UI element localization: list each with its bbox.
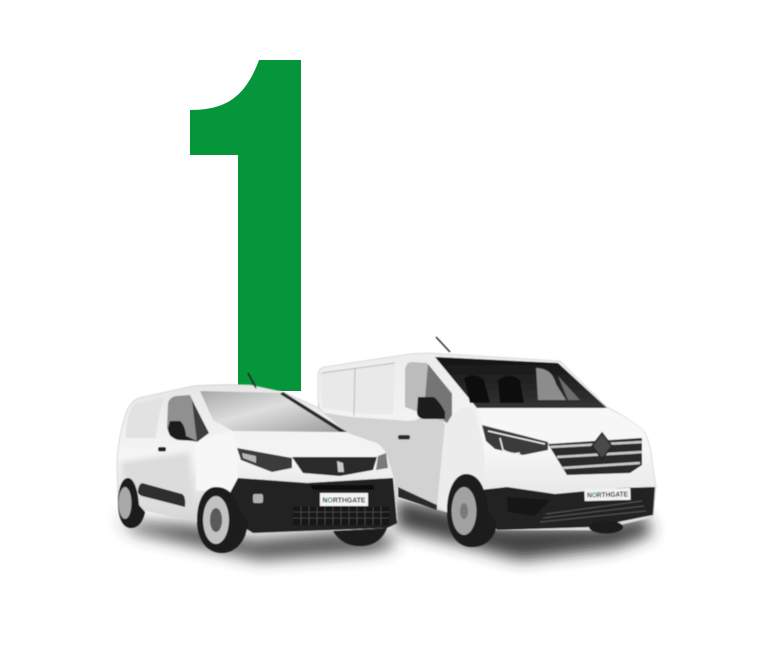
small van plate bbox=[320, 493, 368, 506]
small van front wheel bbox=[197, 487, 248, 553]
small van upper grille bbox=[292, 457, 377, 476]
small van antenna bbox=[248, 373, 256, 388]
small van fog lamp bbox=[253, 494, 263, 503]
small van headlight bbox=[237, 448, 292, 472]
small van windshield bbox=[200, 391, 343, 432]
large van bumper bbox=[480, 487, 655, 530]
large van windshield bbox=[435, 357, 607, 408]
large van: Renault bbox=[318, 337, 656, 547]
large van mirror bbox=[417, 397, 445, 419]
large van sill bbox=[398, 487, 437, 510]
large van plate bbox=[584, 488, 631, 501]
large van antenna bbox=[436, 337, 450, 352]
ground shadows bbox=[112, 498, 652, 560]
small van side window bbox=[167, 395, 208, 442]
large van headlight bbox=[482, 425, 548, 455]
small van rub strip bbox=[138, 483, 185, 507]
small van mirror bbox=[168, 421, 197, 441]
small van body bbox=[117, 385, 397, 533]
small van lower grille bbox=[293, 507, 389, 525]
small van right headlight bbox=[376, 453, 388, 470]
large van body bbox=[318, 353, 656, 530]
large van front wheel bbox=[447, 474, 497, 547]
large van side window bbox=[405, 362, 452, 423]
small van plate: NORTHGATE bbox=[322, 498, 366, 504]
large van far wheel bbox=[589, 520, 623, 534]
large van side shading bbox=[318, 400, 445, 505]
small van far wheel bbox=[333, 528, 387, 546]
large van door handle bbox=[398, 435, 410, 440]
numeral 1 bbox=[190, 60, 301, 391]
Peugeot logo bbox=[337, 461, 344, 472]
Renault logo bbox=[592, 433, 612, 459]
large van grille bbox=[548, 438, 642, 475]
small van door handle bbox=[158, 447, 166, 452]
small van rear wheel bbox=[118, 478, 145, 528]
small van bumper bbox=[230, 478, 397, 533]
large van plate: NORTHGATE bbox=[587, 491, 628, 500]
small van: Peugeot bbox=[117, 373, 397, 553]
